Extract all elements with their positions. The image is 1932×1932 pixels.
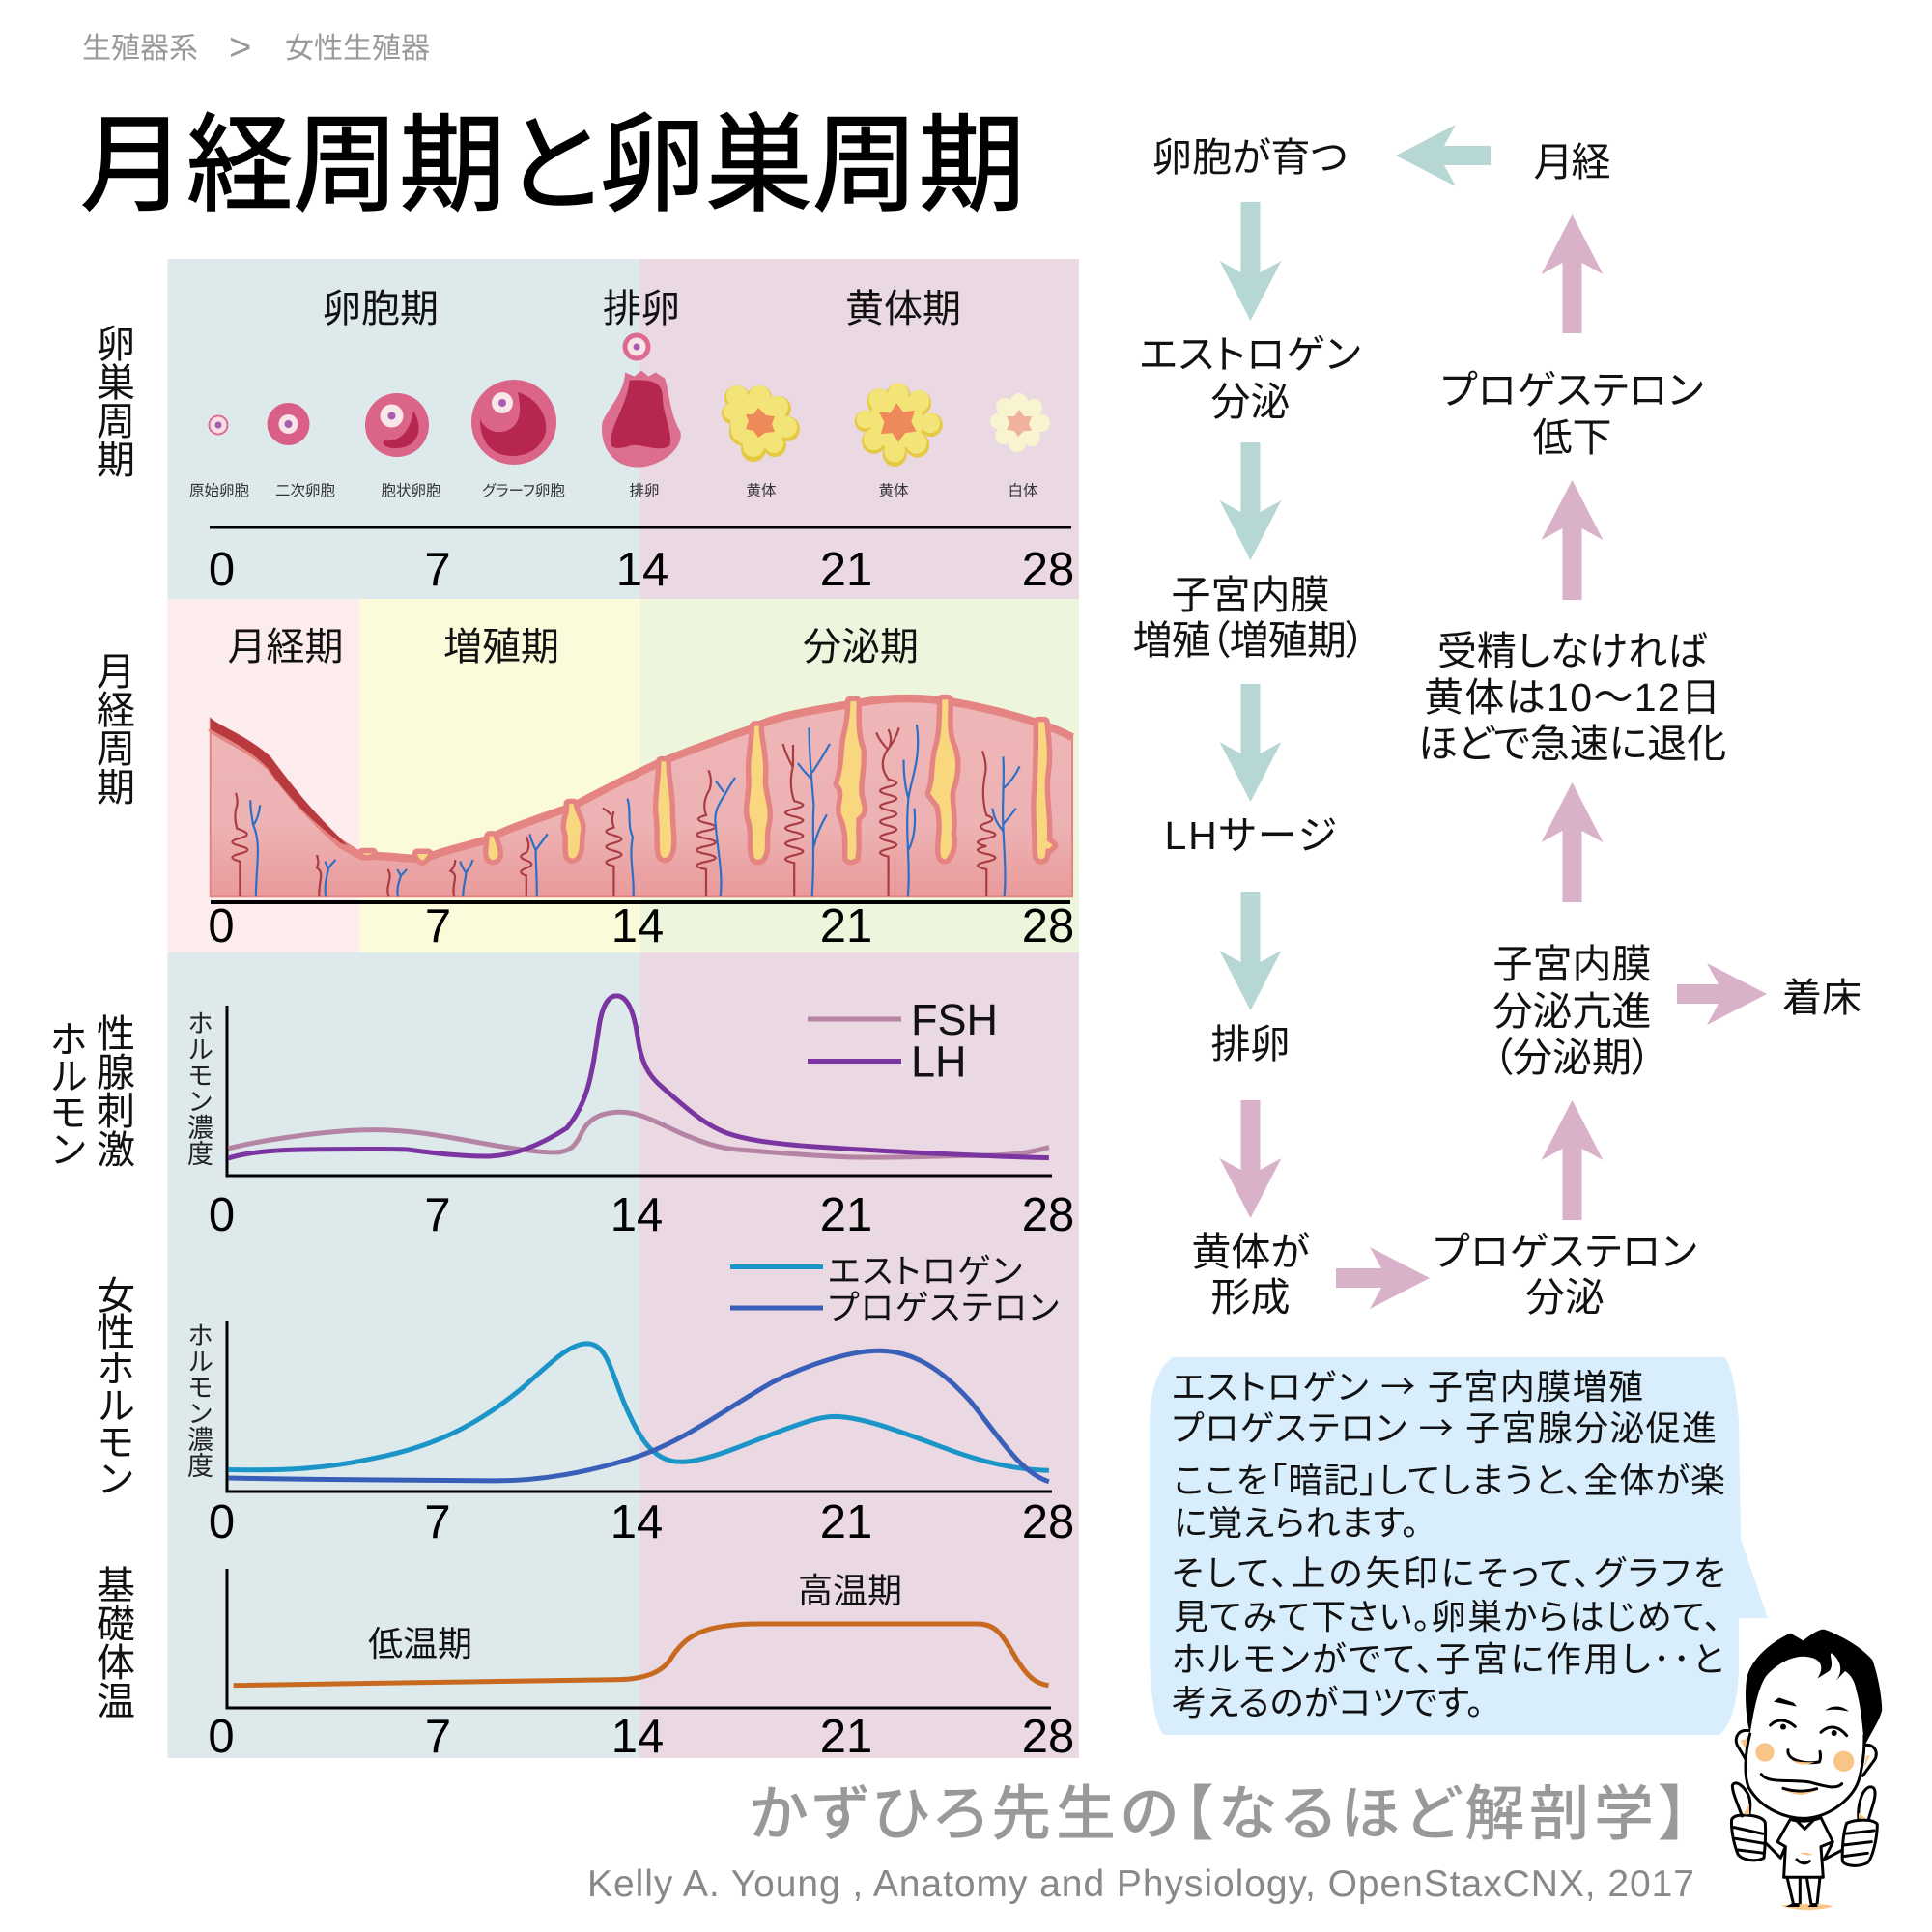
axis numbers: 0 bbox=[209, 544, 235, 596]
row labels: 性腺刺激 bbox=[91, 1013, 134, 1168]
flow: left column text: 増殖（増殖期） bbox=[1132, 618, 1366, 663]
panel: gonadotropin chart bbox=[168, 952, 1079, 1241]
icon: corpus luteum 2 bbox=[855, 384, 943, 467]
flow: left column text: 排卵 bbox=[1211, 1022, 1291, 1066]
flow: left column text: 黄体が bbox=[1191, 1230, 1310, 1274]
icon: primordial follicle bbox=[209, 415, 228, 435]
callout: エストロゲン → 子宮内膜増殖 bbox=[1172, 1359, 1643, 1409]
callout: ここを「暗記」してしまうと、全体が楽 bbox=[1174, 1461, 1725, 1500]
axis label: ホルモン濃度 bbox=[184, 1321, 213, 1478]
axis numbers: 7 bbox=[425, 900, 451, 952]
flow: right column text: 受精しなければ bbox=[1437, 629, 1707, 673]
breadcrumb: 女性生殖器 bbox=[285, 33, 430, 65]
axis numbers: 0 bbox=[208, 1711, 235, 1763]
labels: follicle stages: 黄体 bbox=[746, 482, 777, 499]
callout: プロゲステロン → 子宮腺分泌促進 bbox=[1172, 1401, 1717, 1451]
labels: follicle stages bbox=[189, 482, 1038, 499]
axis numbers: 21 bbox=[820, 900, 872, 952]
panel: menstrual cycle bbox=[168, 599, 1079, 952]
callout: 見てみて下さい。卵巣からはじめて、 bbox=[1174, 1597, 1721, 1636]
face bbox=[1746, 1734, 1864, 1818]
axis numbers: 21 bbox=[820, 1496, 872, 1548]
legend: FSH LH: FSH bbox=[911, 995, 998, 1044]
axis numbers: 14 bbox=[611, 900, 664, 952]
axis numbers: 14 bbox=[616, 544, 668, 596]
flow: left column text bbox=[1132, 135, 1366, 1320]
flow: pink arrows bbox=[1219, 214, 1767, 1309]
callout: そして、上の矢印にそって、グラフを bbox=[1172, 1553, 1725, 1593]
facial features bbox=[1755, 1697, 1854, 1795]
heading: menstrual phases: 分泌期 bbox=[803, 626, 919, 668]
row labels: ホルモン bbox=[43, 1019, 86, 1166]
flow: left column text: 分泌 bbox=[1211, 380, 1291, 424]
right hand bbox=[1842, 1787, 1877, 1865]
panel: basal body temperature bbox=[168, 1553, 1079, 1763]
icon: released ovum bbox=[622, 332, 651, 361]
axis numbers bbox=[209, 1189, 1074, 1241]
left hand bbox=[1731, 1783, 1766, 1861]
icon: corpus luteum 1 bbox=[722, 385, 800, 462]
labels: follicle stages: 排卵 bbox=[629, 482, 660, 499]
flow: right column text: 黄体は10〜12日 bbox=[1424, 675, 1720, 720]
axis numbers: 7 bbox=[424, 1189, 451, 1241]
icon: cartoon doctor bbox=[1731, 1630, 1882, 1910]
row labels bbox=[43, 324, 135, 1719]
axis numbers bbox=[209, 544, 1074, 596]
flow: left column text: 形成 bbox=[1211, 1275, 1291, 1320]
flow: right column text: 月経 bbox=[1534, 140, 1611, 185]
heading: menstrual phases bbox=[228, 626, 919, 668]
flow: right column text: プロゲステロン bbox=[1434, 1230, 1696, 1274]
title: 月経周期と卵巣周期 bbox=[80, 106, 1025, 225]
flow: teal down arrows bbox=[1219, 125, 1491, 1010]
flow: right column text: 低下 bbox=[1532, 415, 1611, 460]
glands bbox=[362, 699, 1053, 861]
callout: 考えるのがコツです。 bbox=[1172, 1683, 1484, 1722]
callout bbox=[1150, 1357, 1768, 1735]
panel: ovarian cycle bbox=[168, 259, 1079, 599]
flow: right column text: 分泌亢進 bbox=[1493, 989, 1652, 1034]
heading: ovarian phases: 排卵 bbox=[603, 288, 680, 330]
icon: antral follicle bbox=[365, 393, 429, 457]
row labels: 女性ホルモン bbox=[91, 1275, 134, 1495]
axis numbers: 14 bbox=[611, 1496, 663, 1548]
axis numbers: 14 bbox=[611, 1711, 664, 1763]
breadcrumb bbox=[82, 26, 430, 69]
flow: right column text: 分泌 bbox=[1525, 1275, 1605, 1320]
axis numbers: 21 bbox=[820, 1189, 872, 1241]
axis label: ホルモン濃度 bbox=[184, 1009, 213, 1166]
illustration: endometrium bbox=[211, 696, 1072, 896]
flow: right column text: ほどで急速に退化 bbox=[1418, 722, 1726, 766]
axis numbers: 0 bbox=[209, 1189, 235, 1241]
axis numbers: 28 bbox=[1022, 1496, 1074, 1548]
body bbox=[1766, 1818, 1842, 1910]
row labels: 卵巣周期 bbox=[91, 324, 134, 478]
icon: secondary follicle bbox=[267, 403, 309, 445]
flow: right column text bbox=[1418, 140, 1861, 1320]
axis numbers: 21 bbox=[820, 1711, 872, 1763]
row labels: 基礎体温 bbox=[91, 1565, 134, 1719]
flow: left column text: エストロゲン bbox=[1140, 332, 1360, 377]
legend: estrogen progesterone bbox=[730, 1253, 1059, 1327]
row labels: 月経周期 bbox=[91, 651, 135, 806]
icon: corpus albicans bbox=[990, 393, 1050, 452]
axis numbers bbox=[209, 1496, 1074, 1548]
labels: follicle stages: 黄体 bbox=[878, 482, 909, 499]
line chart: estrogen and progesterone bbox=[227, 1321, 1052, 1492]
heading: ovarian phases bbox=[323, 288, 961, 330]
labels: follicle stages: グラーフ卵胞 bbox=[482, 482, 565, 499]
breadcrumb: 生殖器系 bbox=[82, 33, 198, 65]
labels: follicle stages: 白体 bbox=[1008, 482, 1038, 499]
labels: follicle stages: 胞状卵胞 bbox=[381, 482, 441, 499]
flow: right column text: （分泌期） bbox=[1493, 1036, 1652, 1080]
axis numbers bbox=[208, 1711, 1074, 1763]
heading: menstrual phases: 増殖期 bbox=[443, 626, 559, 668]
axis numbers: 28 bbox=[1022, 1711, 1074, 1763]
footer title: かずひろ先生の【なるほど解剖学】 bbox=[750, 1781, 1689, 1848]
line chart: FSH and LH bbox=[227, 996, 1052, 1176]
heading: ovarian phases: 黄体期 bbox=[845, 288, 961, 330]
flow: right column text: 着床 bbox=[1782, 976, 1861, 1020]
callout: ホルモンがでて、子宮に作用し･･と bbox=[1172, 1639, 1723, 1679]
flow: left column text: 卵胞が育つ bbox=[1152, 135, 1348, 180]
ears bbox=[1736, 1730, 1876, 1776]
axis numbers: 28 bbox=[1022, 1189, 1074, 1241]
legend: estrogen progesterone: プロゲステロン bbox=[828, 1290, 1059, 1327]
axis numbers: 28 bbox=[1022, 544, 1074, 596]
callout: に覚えられます。 bbox=[1174, 1503, 1419, 1543]
flow: right column text: プロゲステロン bbox=[1441, 368, 1704, 412]
hair bbox=[1746, 1630, 1882, 1747]
labels: temperature phases bbox=[368, 1571, 902, 1663]
labels: follicle stages: 二次卵胞 bbox=[275, 482, 335, 499]
labels: follicle stages: 原始卵胞 bbox=[189, 482, 249, 499]
heading: ovarian phases: 卵胞期 bbox=[323, 288, 439, 330]
axis numbers: 7 bbox=[425, 1711, 451, 1763]
legend: FSH LH: LH bbox=[911, 1037, 967, 1086]
labels: temperature phases: 高温期 bbox=[798, 1571, 902, 1610]
axis numbers: 14 bbox=[611, 1189, 663, 1241]
footer credit: Kelly A. Young , Anatomy and Physiology, OpenStaxCNX, 2017 bbox=[587, 1863, 1694, 1905]
legend: estrogen progesterone: エストロゲン bbox=[828, 1253, 1022, 1291]
labels: temperature phases: 低温期 bbox=[368, 1624, 472, 1663]
axis numbers: 7 bbox=[424, 1496, 451, 1548]
legend: FSH LH bbox=[808, 995, 998, 1086]
flow: left column text: LHサージ bbox=[1165, 813, 1337, 858]
axis numbers: 0 bbox=[208, 900, 235, 952]
breadcrumb: > bbox=[229, 26, 251, 69]
axis numbers: 28 bbox=[1022, 900, 1074, 952]
axis numbers: 7 bbox=[424, 544, 451, 596]
flow: right column text: 子宮内膜 bbox=[1493, 942, 1652, 986]
flow: left column text: 子宮内膜 bbox=[1171, 573, 1329, 617]
icon: ovulating follicle bbox=[602, 371, 681, 468]
axis numbers: 21 bbox=[820, 544, 872, 596]
panel: ovarian hormone chart bbox=[168, 1239, 1079, 1553]
axis numbers: 0 bbox=[209, 1496, 235, 1548]
line chart: temperature bbox=[227, 1569, 1051, 1708]
icon: Graafian follicle bbox=[471, 380, 556, 465]
blood vessels bbox=[232, 724, 1020, 896]
heading: menstrual phases: 月経期 bbox=[228, 626, 344, 668]
axis numbers bbox=[208, 900, 1074, 952]
